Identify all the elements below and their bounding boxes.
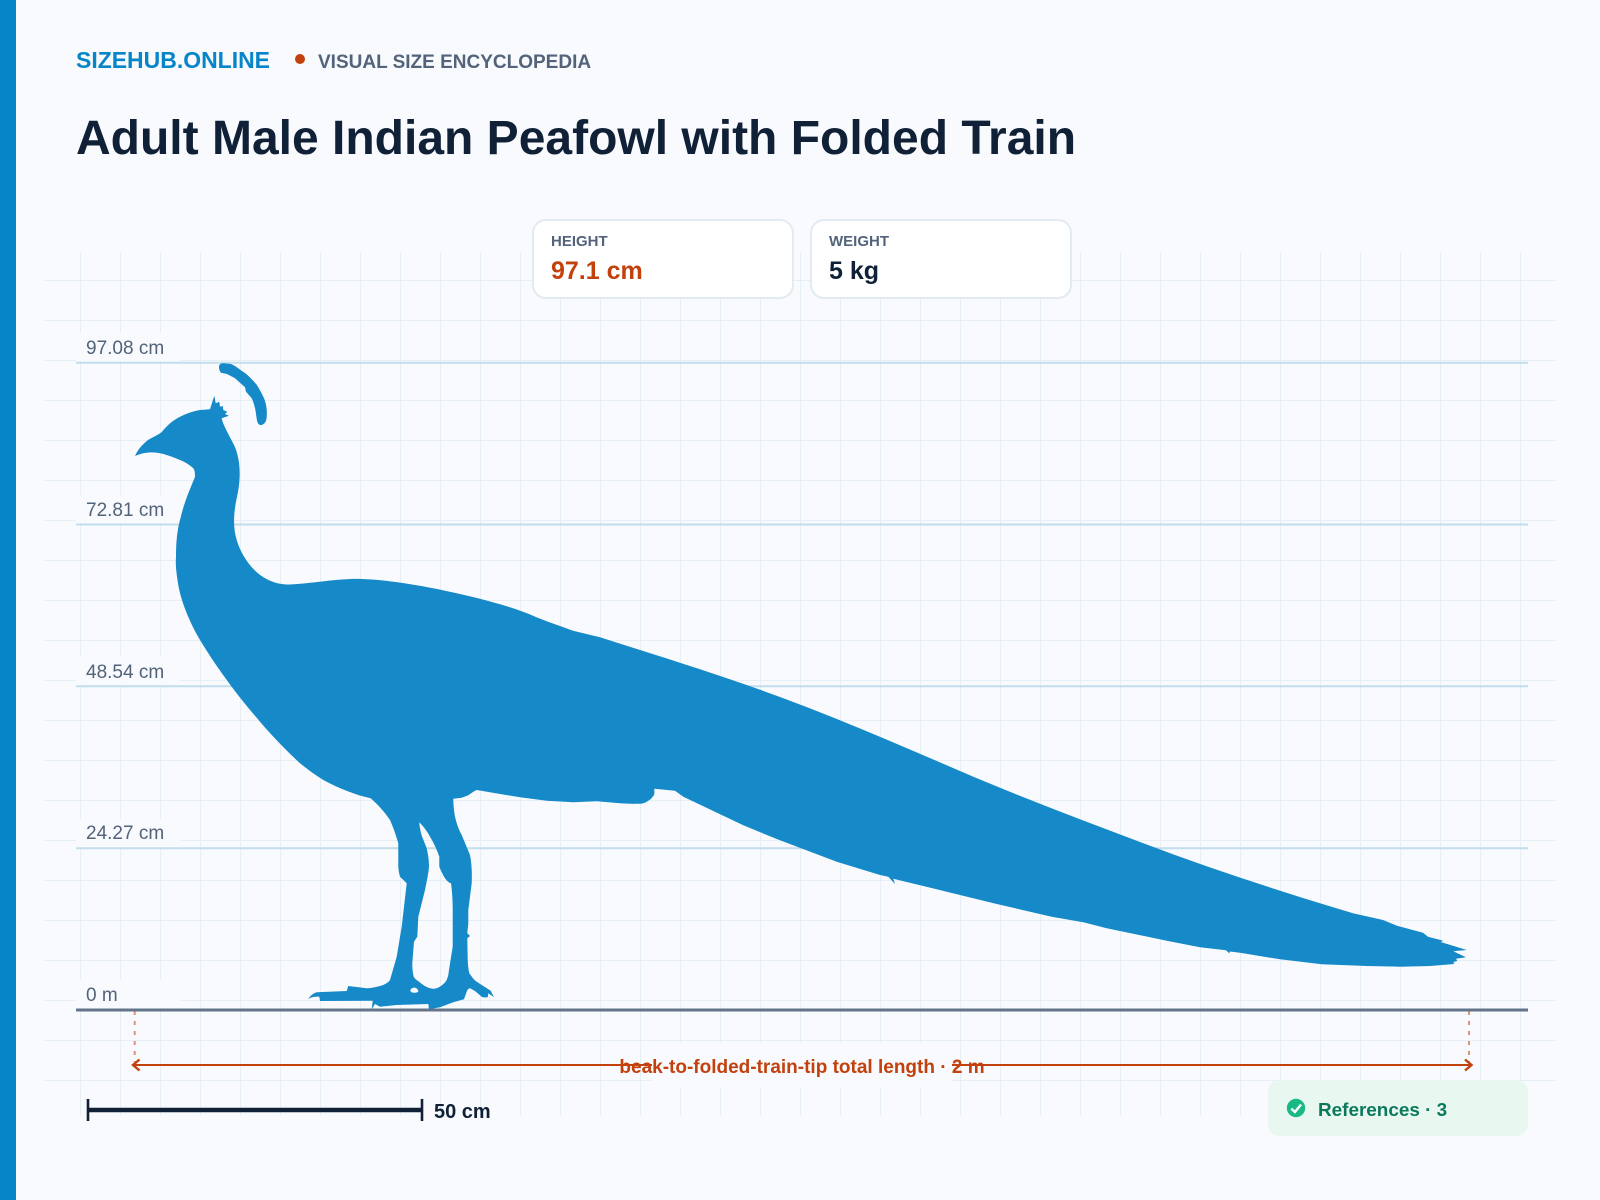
stat card: height: HEIGHT <box>551 233 608 250</box>
length guide: left dotted drop <box>134 1011 136 1062</box>
height gridline and label: 72.81 cm: 72.81 cm <box>86 500 164 521</box>
length label: beak-to-folded-train-tip total length · 2 m <box>619 1057 985 1078</box>
stat card: weight: WEIGHT <box>829 233 889 250</box>
stat card: weight: 5 kg <box>829 257 879 285</box>
length guide: right dotted drop <box>1468 1011 1470 1062</box>
crest feather arc <box>219 363 267 425</box>
references badge: References · 3 <box>1318 1100 1447 1121</box>
height gridline and label: 24.27 cm: 24.27 cm <box>86 823 164 844</box>
brand name: SIZEHUB.ONLINE <box>76 47 270 73</box>
brand tagline: VISUAL SIZE ENCYCLOPEDIA <box>318 52 591 73</box>
brand dot <box>295 54 305 64</box>
height gridline and label: 48.54 cm <box>76 657 1528 686</box>
references badge <box>1268 1080 1528 1136</box>
left accent bar <box>0 0 16 1200</box>
height gridline and label: 97.08 cm: 97.08 cm <box>86 338 164 359</box>
stat card: height: 97.1 cm <box>551 257 643 285</box>
scale bar: 50 cm <box>434 1101 491 1123</box>
icon: check circle <box>1287 1099 1305 1117</box>
length dimension arrow <box>133 1060 1472 1070</box>
ground line and label: 0 m: 0 m <box>86 985 118 1006</box>
stat card: height <box>533 220 793 298</box>
height gridline and label: 48.54 cm: 48.54 cm <box>86 662 164 683</box>
title: Adult Male Indian Peafowl with Folded Train <box>76 112 1076 165</box>
stat card: weight <box>811 220 1071 298</box>
background grid <box>44 252 1556 1116</box>
peafowl silhouette <box>135 363 1467 1009</box>
ground line and label: 0 m <box>76 980 1528 1010</box>
height gridline and label: 72.81 cm <box>76 495 1528 524</box>
length label background <box>652 1043 952 1087</box>
header: brand line <box>76 47 591 73</box>
body, neck, head, train and legs <box>135 396 1467 1009</box>
height gridline and label: 97.08 cm <box>76 333 1528 363</box>
height gridline and label: 24.27 cm <box>76 819 1528 848</box>
